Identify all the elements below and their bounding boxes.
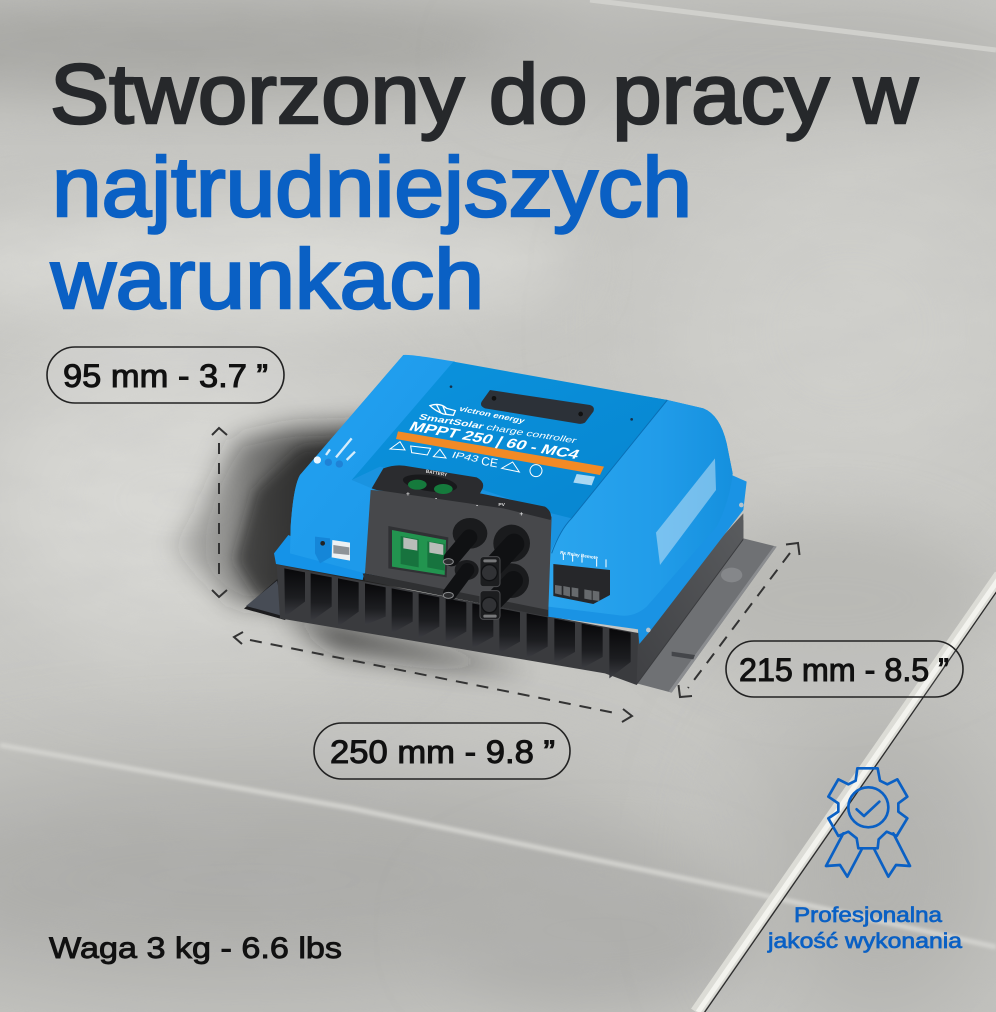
- label text on top face: [390, 404, 595, 485]
- CE mark: CE: [480, 454, 499, 471]
- device cast shadow: [172, 425, 530, 672]
- status LEDs: [314, 438, 355, 468]
- right lobe: [548, 400, 733, 616]
- title line 3: warunkach: [50, 232, 484, 326]
- badge caption: [767, 904, 962, 953]
- base silhouette: [290, 355, 733, 616]
- left lobe: [290, 355, 455, 573]
- flange left: [274, 535, 365, 580]
- signal terminal block: [553, 550, 610, 604]
- logo: [430, 404, 455, 415]
- top face: [352, 362, 667, 518]
- check mark: [857, 802, 879, 816]
- IP rating: IP43: [450, 450, 481, 464]
- connector block: PV: [498, 502, 506, 508]
- mounting plate: [244, 538, 777, 693]
- green terminal: [388, 526, 448, 577]
- connector block: [363, 465, 552, 619]
- terminal labels: Rx Relay Remote: [560, 550, 599, 560]
- blue housing: [274, 355, 747, 644]
- screw holes: [450, 385, 744, 632]
- title: [50, 47, 918, 326]
- pill: height: 95 mm - 3.7 ”: [63, 358, 268, 394]
- inner circle: [848, 787, 888, 827]
- pill: depth: [726, 641, 963, 697]
- certification icons: [390, 442, 519, 472]
- model: MPPT 250 | 60 - MC4: [406, 418, 583, 462]
- heat sink: [277, 513, 743, 685]
- pill: width: [314, 723, 570, 779]
- display cover: [481, 390, 594, 424]
- ribbons: [826, 833, 910, 877]
- weight text: Waga 3 kg - 6.6 lbs: [49, 932, 342, 965]
- product name: SmartSolar charge controller: [417, 412, 579, 445]
- heat sink fins: [284, 568, 631, 678]
- badge caption: Profesjonalna: [794, 904, 942, 927]
- pill: depth: 215 mm - 8.5 ”: [739, 652, 949, 688]
- terminal holes: [402, 472, 458, 495]
- dimension arrow: depth: [678, 543, 800, 697]
- brand: victron energy: [457, 404, 528, 425]
- USB port: [315, 537, 350, 563]
- badge caption: jakość wykonania: [767, 930, 962, 953]
- polarity marks: +: [406, 491, 410, 498]
- ventilation label: [656, 458, 716, 565]
- gear outline: [828, 768, 907, 848]
- title line 1: Stworzony do pracy w: [50, 47, 918, 141]
- pill: width: 250 mm - 9.8 ”: [330, 734, 555, 770]
- connector block: +: [519, 511, 523, 518]
- title line 2: najtrudniejszych: [52, 140, 692, 234]
- connector block: -: [476, 502, 478, 509]
- product: MPPT charge controller: [244, 355, 777, 693]
- flange right: [547, 475, 747, 644]
- pill: height: [47, 347, 284, 403]
- dimension arrow: width: [234, 632, 632, 722]
- QR code: [573, 474, 595, 485]
- battery label: BATTERY: [425, 469, 448, 478]
- connector block: -: [435, 496, 437, 503]
- dimension arrow: height: [212, 428, 227, 597]
- MC4 connectors: [443, 518, 530, 619]
- icon: quality gear badge: [826, 768, 910, 877]
- orange stripe: [396, 431, 604, 475]
